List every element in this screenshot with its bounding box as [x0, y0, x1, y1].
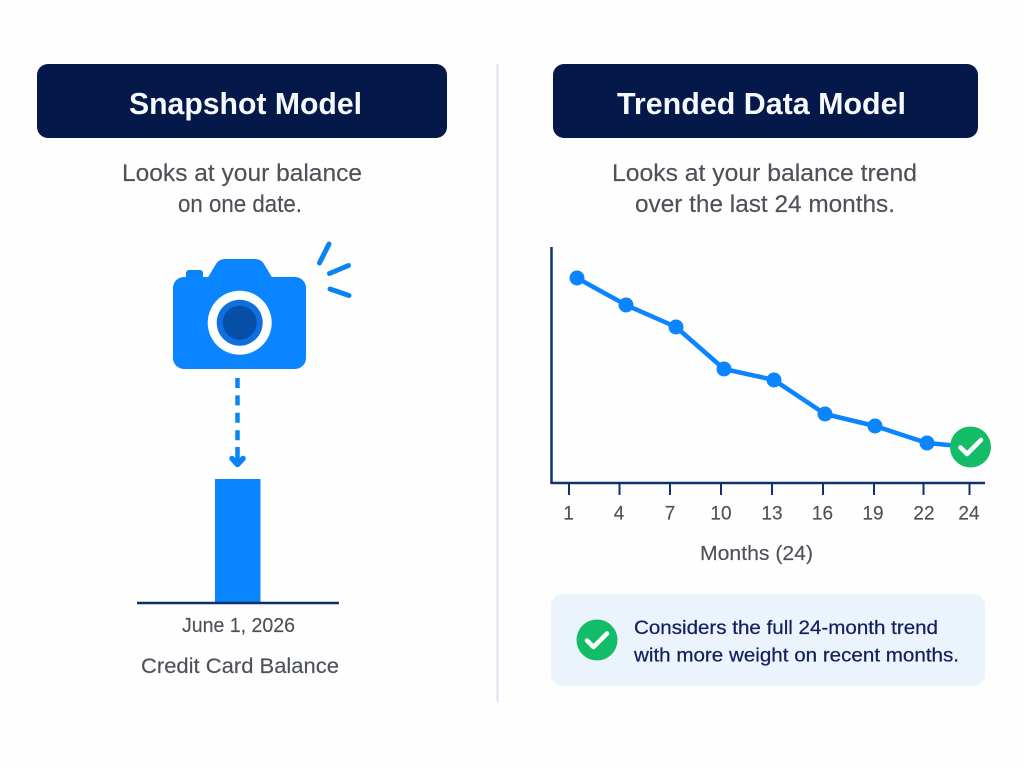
chart line and data points — [570, 270, 970, 450]
label: date: June 1, 2026 — [182, 615, 295, 637]
text: trended description: Looks at your balance trend — [612, 160, 917, 187]
heading: trended data model: Trended Data Model — [617, 86, 906, 121]
chart axis labels: 22 — [913, 504, 935, 524]
chart axis labels: 24 — [958, 504, 980, 524]
callout: full trend — [551, 594, 985, 686]
chart axes — [551, 247, 985, 495]
arrow: camera to bar — [232, 378, 243, 464]
heading: snapshot model: Snapshot Model — [129, 86, 362, 121]
text: callout message: with more weight on recent months. — [633, 644, 959, 666]
icon: callout check — [576, 620, 618, 660]
bar chart: single balance — [137, 479, 339, 603]
text: callout message: Considers the full 24-month trend — [634, 617, 938, 639]
chart axis labels: 19 — [862, 504, 884, 524]
line chart: balance trend — [551, 247, 991, 524]
icon: chart end check — [950, 426, 991, 468]
chart axis labels: 1 — [563, 504, 574, 524]
chart axis labels: 7 — [665, 504, 675, 524]
panel: snapshot model — [37, 64, 447, 678]
chart axis labels: 16 — [812, 504, 833, 524]
chart axis labels: 4 — [614, 504, 625, 524]
label: credit card balance: Credit Card Balance — [141, 654, 339, 678]
text: snapshot description — [122, 160, 362, 218]
icon: camera — [173, 259, 306, 369]
chart axis labels: 10 — [710, 504, 732, 524]
panel: trended data model — [551, 64, 991, 686]
text: snapshot description: on one date. — [178, 191, 302, 218]
text: callout message — [633, 617, 959, 666]
icon: camera flash rays — [320, 244, 349, 296]
chart axis labels — [563, 504, 980, 524]
chart axis labels: 13 — [761, 504, 783, 524]
label: months axis: Months (24) — [700, 543, 813, 565]
heading: trended data model — [553, 64, 978, 138]
text: trended description: over the last 24 months. — [635, 191, 895, 218]
text: trended description — [612, 160, 917, 218]
text: snapshot description: Looks at your balance — [122, 160, 362, 187]
heading: snapshot model — [37, 64, 447, 138]
